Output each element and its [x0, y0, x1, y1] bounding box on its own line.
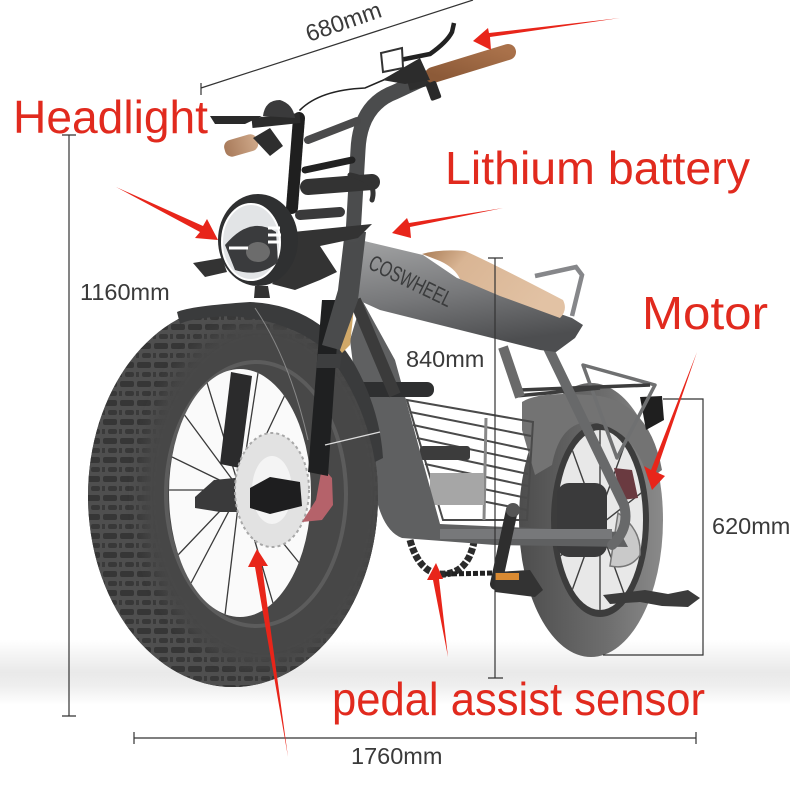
chainring — [410, 540, 495, 574]
inner fork — [220, 372, 252, 468]
arrow: headlight — [116, 187, 218, 240]
width dimension line — [201, 0, 473, 95]
label: Motor: Motor — [642, 287, 768, 339]
handlebar left — [210, 100, 300, 158]
crank and pedal — [495, 503, 543, 597]
front fork — [255, 298, 380, 476]
ground shadow — [0, 640, 790, 705]
taillight — [640, 396, 664, 430]
risers and crossbars — [292, 75, 425, 235]
main tube — [358, 240, 583, 352]
dimension lines — [62, 0, 703, 744]
brake disc — [235, 433, 309, 547]
dimension: 840mm: 840mm — [406, 346, 484, 372]
arrow: battery — [392, 208, 503, 238]
bottom bracket bar — [440, 529, 612, 539]
bicycle illustration — [85, 23, 700, 690]
arrow: grip — [473, 18, 620, 50]
lower frame body — [350, 300, 628, 547]
seat height dimension line — [488, 258, 503, 678]
rear wheel — [519, 383, 663, 657]
height dimension line — [62, 135, 76, 716]
head tube — [322, 230, 366, 350]
label: Lithium battery: Lithium battery — [445, 142, 750, 194]
spokes — [169, 372, 299, 614]
handlebar right — [381, 23, 508, 101]
right hub — [250, 477, 302, 514]
dimension: 1160mm: 1160mm — [80, 279, 170, 305]
dimension: 1760mm: 1760mm — [351, 743, 442, 769]
length dimension line — [134, 732, 696, 744]
seat — [422, 250, 565, 318]
rear stay spring — [355, 300, 395, 395]
front fender — [177, 302, 383, 462]
footpeg bar — [352, 382, 434, 397]
headlight — [193, 194, 372, 298]
wheel dimension line — [603, 399, 703, 655]
dimension: 620mm: 620mm — [712, 513, 790, 539]
label: Headlight: Headlight — [13, 91, 208, 143]
left hub — [195, 477, 245, 512]
brand name: COSWHEEL — [365, 250, 457, 312]
label: pedal assist sensor: pedal assist sensor — [332, 673, 705, 725]
kickstand — [603, 590, 700, 607]
arrow: disc brake — [248, 549, 288, 757]
seat backrest loop — [535, 267, 582, 316]
arrow: pedal sensor — [427, 563, 448, 657]
caliper — [302, 467, 333, 522]
main strut — [537, 325, 626, 545]
basket electronics — [420, 446, 484, 505]
basket — [407, 400, 533, 520]
front wheel — [85, 300, 385, 690]
arrow: motor — [644, 352, 697, 490]
rear rack — [503, 347, 655, 458]
